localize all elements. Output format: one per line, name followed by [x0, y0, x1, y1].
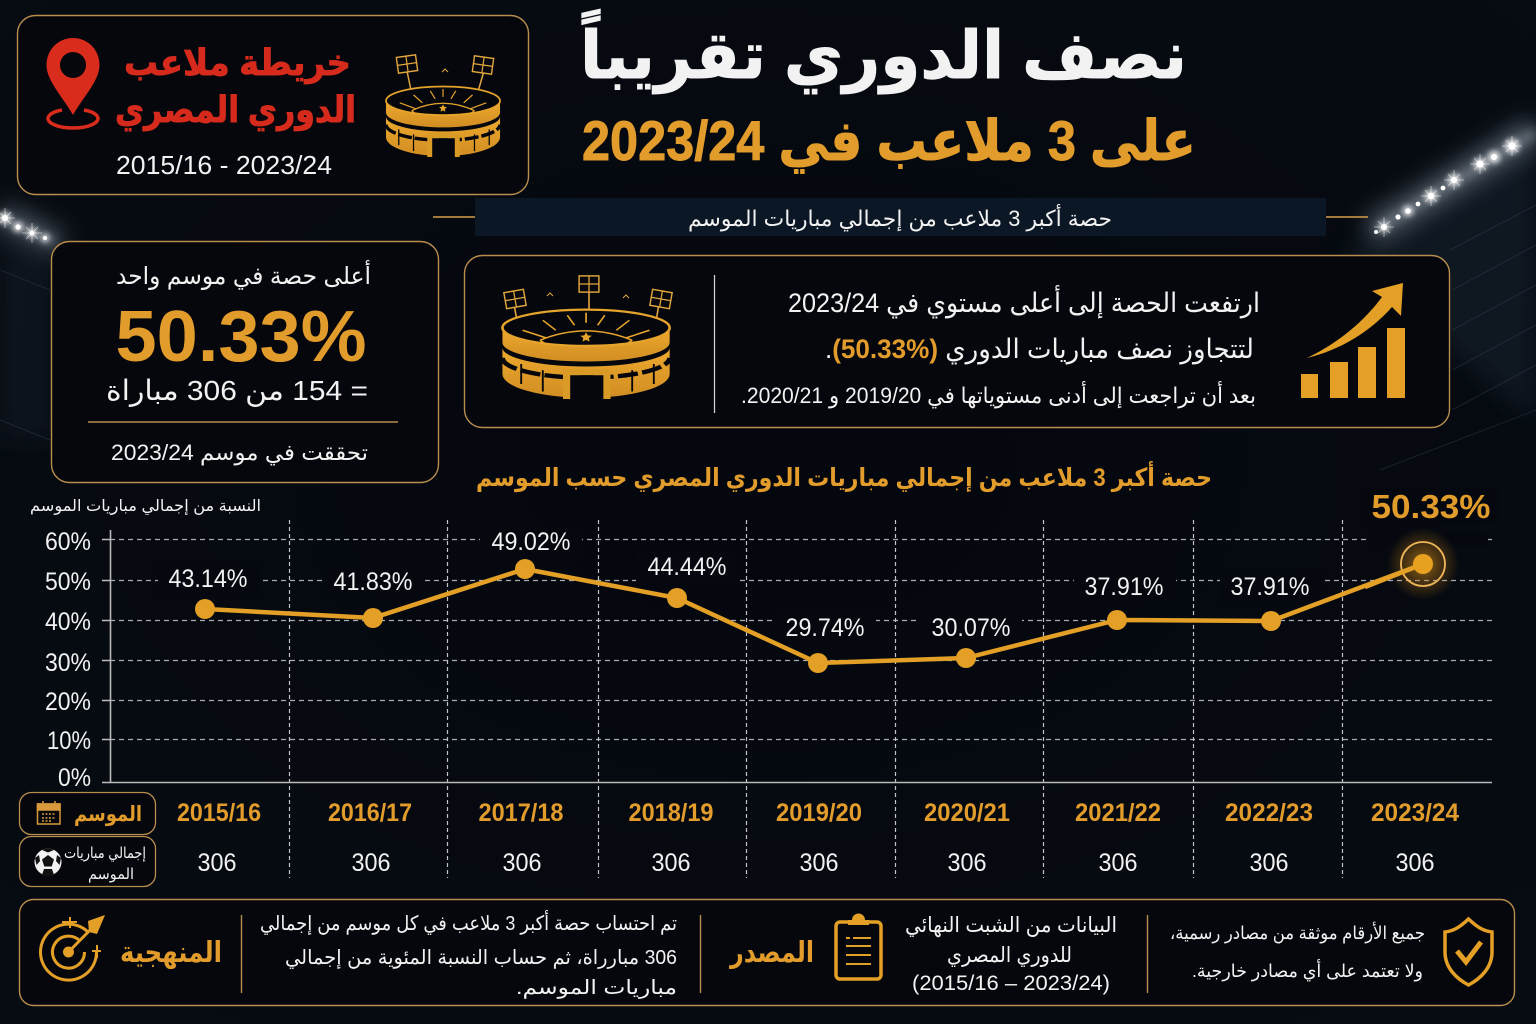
row label: total matches: [20, 836, 156, 886]
card title: خريطة ملاعب: [124, 42, 351, 84]
axis labels: 40%: [45, 608, 91, 636]
data points: [195, 559, 1281, 673]
data labels: 30.07%: [932, 614, 1010, 642]
data labels: 49.02%: [492, 528, 570, 556]
data labels: 50.33%: [1372, 488, 1490, 525]
heading: source: المصدر: [728, 937, 814, 969]
season labels row: 2020/21: [924, 799, 1010, 827]
source text: (2015/16 – 2023/24): [912, 972, 1110, 995]
subtitle band: [433, 198, 1368, 236]
data labels: 41.83%: [334, 568, 412, 596]
season labels row: 2016/17: [328, 799, 412, 827]
season labels row: 2019/20: [776, 799, 862, 827]
season labels row: 2017/18: [478, 799, 564, 827]
title: [580, 8, 1196, 174]
season labels row: 2015/16: [177, 799, 261, 827]
match totals row: 306: [352, 849, 390, 877]
subtitle band: حصة أكبر 3 ملاعب من إجمالي مباريات الموسم: [688, 204, 1112, 232]
heading: methodology: المنهجية: [120, 937, 222, 969]
icon: target with arrow: [41, 915, 105, 980]
title: نصف الدوري تقريباً: [580, 8, 1187, 95]
match totals row: 306: [198, 849, 236, 877]
icon: red location pin: [46, 38, 100, 128]
data labels: 43.14%: [168, 565, 248, 593]
methodology text: مباريات الموسم.: [516, 977, 677, 999]
season labels row: 2021/22: [1075, 799, 1161, 827]
axis labels: 20%: [45, 688, 91, 716]
methodology text: [260, 910, 677, 999]
row label: total matches: الموسم: [88, 866, 134, 883]
icon: stadium small: [386, 55, 500, 157]
data labels: 44.44%: [648, 553, 726, 581]
title: على 3 ملاعب في 2023/24: [582, 109, 1196, 174]
icon: calendar: [38, 801, 60, 824]
match totals row: 306: [502, 849, 542, 877]
season labels row: 2018/19: [628, 799, 714, 827]
insight text: بعد أن تراجعت إلى أدنى مستوياتها في 2019/20 و 2020/21.: [741, 381, 1256, 409]
verification note: [1170, 922, 1425, 982]
match totals row: 306: [948, 849, 986, 877]
source text: البيانات من الشبت النهائي: [905, 914, 1117, 937]
match totals row: 306: [652, 849, 690, 877]
season labels row: 2023/24: [1371, 799, 1459, 827]
card date range: 2015/16 - 2023/24: [116, 150, 332, 180]
source text: للدوري المصري: [947, 944, 1072, 967]
panel: methodology and source footer: [20, 900, 1514, 1006]
data labels: 37.91%: [1084, 573, 1164, 601]
icon: football: [34, 848, 62, 876]
match totals row: 306: [1098, 849, 1138, 877]
icon: stadium large: [502, 276, 672, 399]
insight text: لتتجاوز نصف مباريات الدوري ‪(50.33%)‬.: [825, 334, 1254, 365]
KPI value: 50.33%: [116, 297, 366, 377]
axis labels: 30%: [45, 649, 91, 677]
axis labels: 10%: [47, 727, 91, 755]
insight text: ارتفعت الحصة إلى أعلى مستوي في 2023/24: [788, 284, 1260, 319]
season labels row: 2022/23: [1225, 799, 1313, 827]
match totals row: [198, 849, 1434, 877]
row label: total matches: إجمالي مباريات: [64, 845, 146, 863]
highlighted peak point: [1365, 528, 1459, 600]
axis labels: [45, 528, 91, 792]
label backdrops: [158, 488, 1499, 642]
card title: الدوري المصري: [115, 89, 356, 131]
card title: [115, 42, 356, 131]
line chart: [45, 488, 1499, 878]
KPI season note: تحققت في موسم 2023/24: [111, 440, 368, 466]
match totals row: 306: [1250, 849, 1288, 877]
row label: season: [20, 792, 156, 834]
data labels: 37.91%: [1230, 573, 1310, 601]
data labels: 29.74%: [786, 614, 864, 642]
insight text: [741, 284, 1260, 409]
methodology text: 306 مبارراة، ثم حساب النسبة المئوية من إجمالي: [285, 947, 677, 970]
data line: [205, 564, 1423, 663]
source text: [905, 914, 1117, 995]
axis labels: 0%: [58, 764, 91, 792]
icon: shield check: [1445, 919, 1492, 985]
icon: clipboard: [836, 914, 881, 979]
KPI label: أعلى حصة في موسم واحد: [116, 260, 371, 290]
season labels row: [177, 799, 1459, 827]
chart heading: حصة أكبر 3 ملاعب من إجمالي مباريات الدوري المصري حسب الموسم: [476, 461, 1212, 493]
KPI detail: = 154 من 306 مباراة: [106, 375, 368, 407]
panel: highest share KPI: [52, 242, 438, 482]
chart axis title: النسبة من إجمالي مباريات الموسم: [30, 498, 261, 516]
verification note: ولا تعتمد على أي مصادر خارجية.: [1192, 959, 1423, 982]
verification note: جميع الأرقام موثقة من مصادر رسمية،: [1170, 922, 1425, 944]
axis labels: 60%: [45, 528, 91, 556]
row label: season: الموسم: [74, 803, 142, 826]
panel: insight: [464, 256, 1450, 428]
match totals row: 306: [800, 849, 838, 877]
icon: growth bars with arrow: [1301, 283, 1405, 398]
axis labels: 50%: [45, 568, 91, 596]
methodology text: تم احتساب حصة أكبر 3 ملاعب في كل موسم من إجمالي: [260, 910, 677, 936]
match totals row: 306: [1396, 849, 1434, 877]
panel: map title card: [18, 16, 528, 194]
data labels: [168, 488, 1490, 642]
